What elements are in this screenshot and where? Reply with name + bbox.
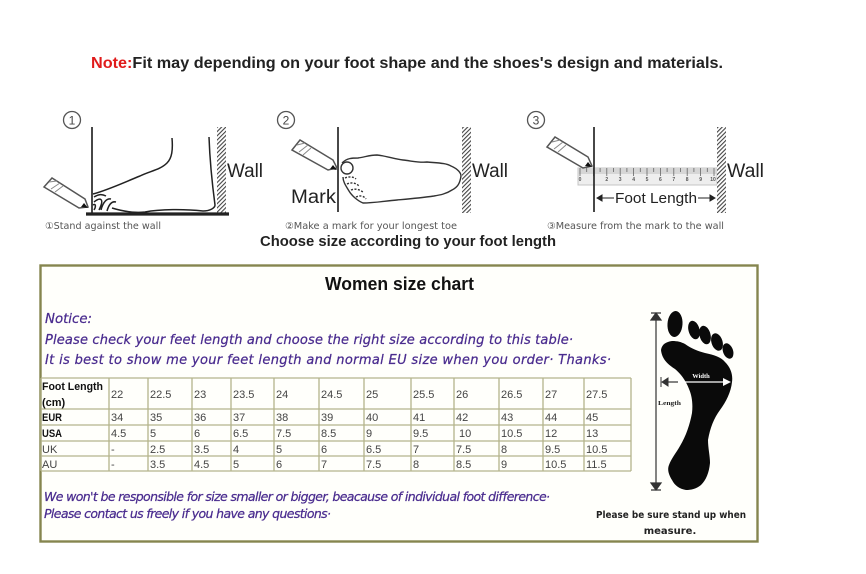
row: UK: 6 — [321, 444, 327, 456]
length label: Length — [658, 400, 681, 407]
mark label: Mark — [291, 187, 337, 208]
row: AU: 11.5 — [586, 459, 607, 471]
foot silhouette — [661, 311, 735, 490]
row: AU: 6 — [276, 459, 282, 471]
foot top view — [341, 155, 461, 203]
row: USA: 9.5 — [413, 428, 428, 440]
ruler: 3 — [619, 177, 622, 183]
row: UK: UK — [42, 444, 58, 456]
row: foot length: 25.5 — [413, 389, 434, 401]
wall 3 — [717, 127, 726, 213]
row: AU: 3.5 — [150, 459, 165, 471]
ruler: 5 — [646, 177, 649, 183]
row: AU: 7.5 — [366, 459, 381, 471]
ruler: 4 — [632, 177, 635, 183]
row: AU — [42, 459, 607, 471]
row: USA: 13 — [586, 428, 598, 440]
row: UK: 9.5 — [545, 444, 560, 456]
ruler: 0 — [579, 177, 582, 183]
row: EUR: 37 — [233, 412, 245, 424]
ruler: 6 — [659, 177, 662, 183]
size table — [41, 378, 631, 471]
row: EUR: 38 — [276, 412, 288, 424]
ruler: 2 — [605, 177, 608, 183]
step 3: measure foot length — [528, 112, 764, 232]
row: foot length: 26.5 — [501, 389, 522, 401]
row: UK: 10.5 — [586, 444, 607, 456]
row: AU: 4.5 — [194, 459, 209, 471]
choose size heading: Choose size according to your foot length — [260, 234, 556, 250]
row: UK: 2.5 — [150, 444, 165, 456]
row: foot length: (cm) — [42, 397, 66, 409]
note heading: Note:Fit may depending on your foot shape and the shoes's design and materials. — [91, 55, 723, 72]
row: foot length: 27 — [545, 389, 557, 401]
measuring note: Please be sure stand up when — [596, 510, 746, 521]
pencil 1 — [44, 178, 88, 208]
step number 3: 3 — [533, 114, 540, 128]
step 1: stand against the wall — [44, 112, 263, 232]
step number 2 — [278, 112, 294, 128]
row: EUR: 34 — [111, 412, 123, 424]
row: AU: 7 — [321, 459, 327, 471]
row: EUR: 43 — [501, 412, 513, 424]
row: EUR: EUR — [42, 412, 62, 424]
row: foot length: 23.5 — [233, 389, 254, 401]
row: UK: 6.5 — [366, 444, 381, 456]
row: foot length: Foot Length — [42, 381, 103, 393]
measuring note — [596, 510, 746, 537]
row: UK: 7 — [413, 444, 419, 456]
foot length label: Foot Length — [615, 190, 697, 207]
length arrow — [651, 313, 661, 490]
floor — [86, 212, 229, 216]
row: USA: 6.5 — [233, 428, 248, 440]
notice text — [45, 311, 611, 368]
row: AU: AU — [42, 459, 57, 471]
pencil 2 — [292, 140, 337, 170]
ruler: 7 — [672, 177, 675, 183]
step number 1 — [64, 112, 80, 128]
panel frame — [40, 266, 758, 542]
notice text: Notice: — [45, 311, 92, 327]
row: UK: 7.5 — [456, 444, 471, 456]
row: foot length: 23 — [194, 389, 206, 401]
row: UK: - — [111, 444, 115, 456]
table grid — [41, 378, 631, 471]
row: foot length: 25 — [366, 389, 378, 401]
row: AU: - — [111, 459, 115, 471]
notice text: It is best to show me your feet length and normal EU size when you order· Thanks· — [45, 353, 611, 368]
mark line 3 — [593, 127, 595, 212]
wall label 3: Wall — [727, 161, 764, 182]
row: EUR: 35 — [150, 412, 162, 424]
row: USA: 5 — [150, 428, 156, 440]
wall label 1: Wall — [227, 161, 263, 182]
row: EUR: 39 — [321, 412, 333, 424]
mark line 1 — [91, 127, 93, 214]
row: UK: 3.5 — [194, 444, 209, 456]
mark line 2 — [337, 127, 339, 212]
wall 2 — [462, 127, 471, 213]
caption 2: ②Make a mark for your longest toe — [285, 221, 457, 232]
disclaimer text: Please contact us freely if you have any questions· — [44, 506, 331, 521]
row: USA — [42, 428, 598, 440]
ruler: 8 — [686, 177, 689, 183]
width arrow — [661, 377, 731, 387]
caption 3: ③Measure from the mark to the wall — [547, 221, 724, 232]
row: USA: USA — [42, 428, 62, 440]
ruler: 10 — [710, 177, 716, 183]
row: AU: 8.5 — [456, 459, 471, 471]
wall 1 — [217, 127, 226, 213]
row: USA: 12 — [545, 428, 557, 440]
row: UK: 5 — [276, 444, 282, 456]
foot length arrow — [597, 195, 715, 201]
row: USA: 10 — [459, 428, 471, 440]
foot side view — [93, 137, 215, 212]
row: UK: 8 — [501, 444, 507, 456]
row: USA: 6 — [194, 428, 200, 440]
wall label 2: Wall — [472, 161, 508, 182]
row: foot length — [42, 381, 607, 409]
row: USA: 7.5 — [276, 428, 291, 440]
row: EUR — [42, 412, 598, 424]
row: AU: 9 — [501, 459, 507, 471]
row: USA: 9 — [366, 428, 372, 440]
row: foot length: 26 — [456, 389, 468, 401]
row: EUR: 44 — [545, 412, 557, 424]
row: foot length: 22 — [111, 389, 123, 401]
disclaimer text: We won't be responsible for size smaller or bigger, beacause of individual foot difference· — [44, 489, 550, 504]
panel: women size chart — [40, 266, 758, 542]
row: USA: 4.5 — [111, 428, 126, 440]
row: EUR: 42 — [456, 412, 468, 424]
row: USA: 8.5 — [321, 428, 336, 440]
notice text: Please check your feet length and choose the right size according to this table· — [45, 333, 573, 348]
row: AU: 5 — [233, 459, 239, 471]
row: USA: 10.5 — [501, 428, 522, 440]
step number 1: 1 — [69, 114, 76, 128]
width label: Width — [692, 373, 710, 380]
step number 2: 2 — [283, 114, 290, 128]
step 2: mark longest toe — [278, 112, 508, 232]
row: foot length: 24 — [276, 389, 288, 401]
row: foot length: 22.5 — [150, 389, 171, 401]
disclaimer text — [44, 489, 550, 521]
foot measurement diagram — [651, 311, 735, 490]
row: UK: 4 — [233, 444, 239, 456]
row: UK — [42, 444, 607, 456]
caption 1: ①Stand against the wall — [45, 221, 161, 232]
row: EUR: 41 — [413, 412, 425, 424]
pencil 3 — [547, 137, 592, 168]
step number 3 — [528, 112, 544, 128]
panel title: Women size chart — [325, 274, 474, 294]
row: foot length: 27.5 — [586, 389, 607, 401]
ruler: 9 — [699, 177, 702, 183]
row: AU: 10.5 — [545, 459, 566, 471]
row: AU: 8 — [413, 459, 419, 471]
row: foot length: 24.5 — [321, 389, 342, 401]
row: EUR: 36 — [194, 412, 206, 424]
measuring note: measure. — [644, 526, 696, 537]
row: EUR: 40 — [366, 412, 378, 424]
ruler — [578, 168, 717, 185]
row: EUR: 45 — [586, 412, 598, 424]
